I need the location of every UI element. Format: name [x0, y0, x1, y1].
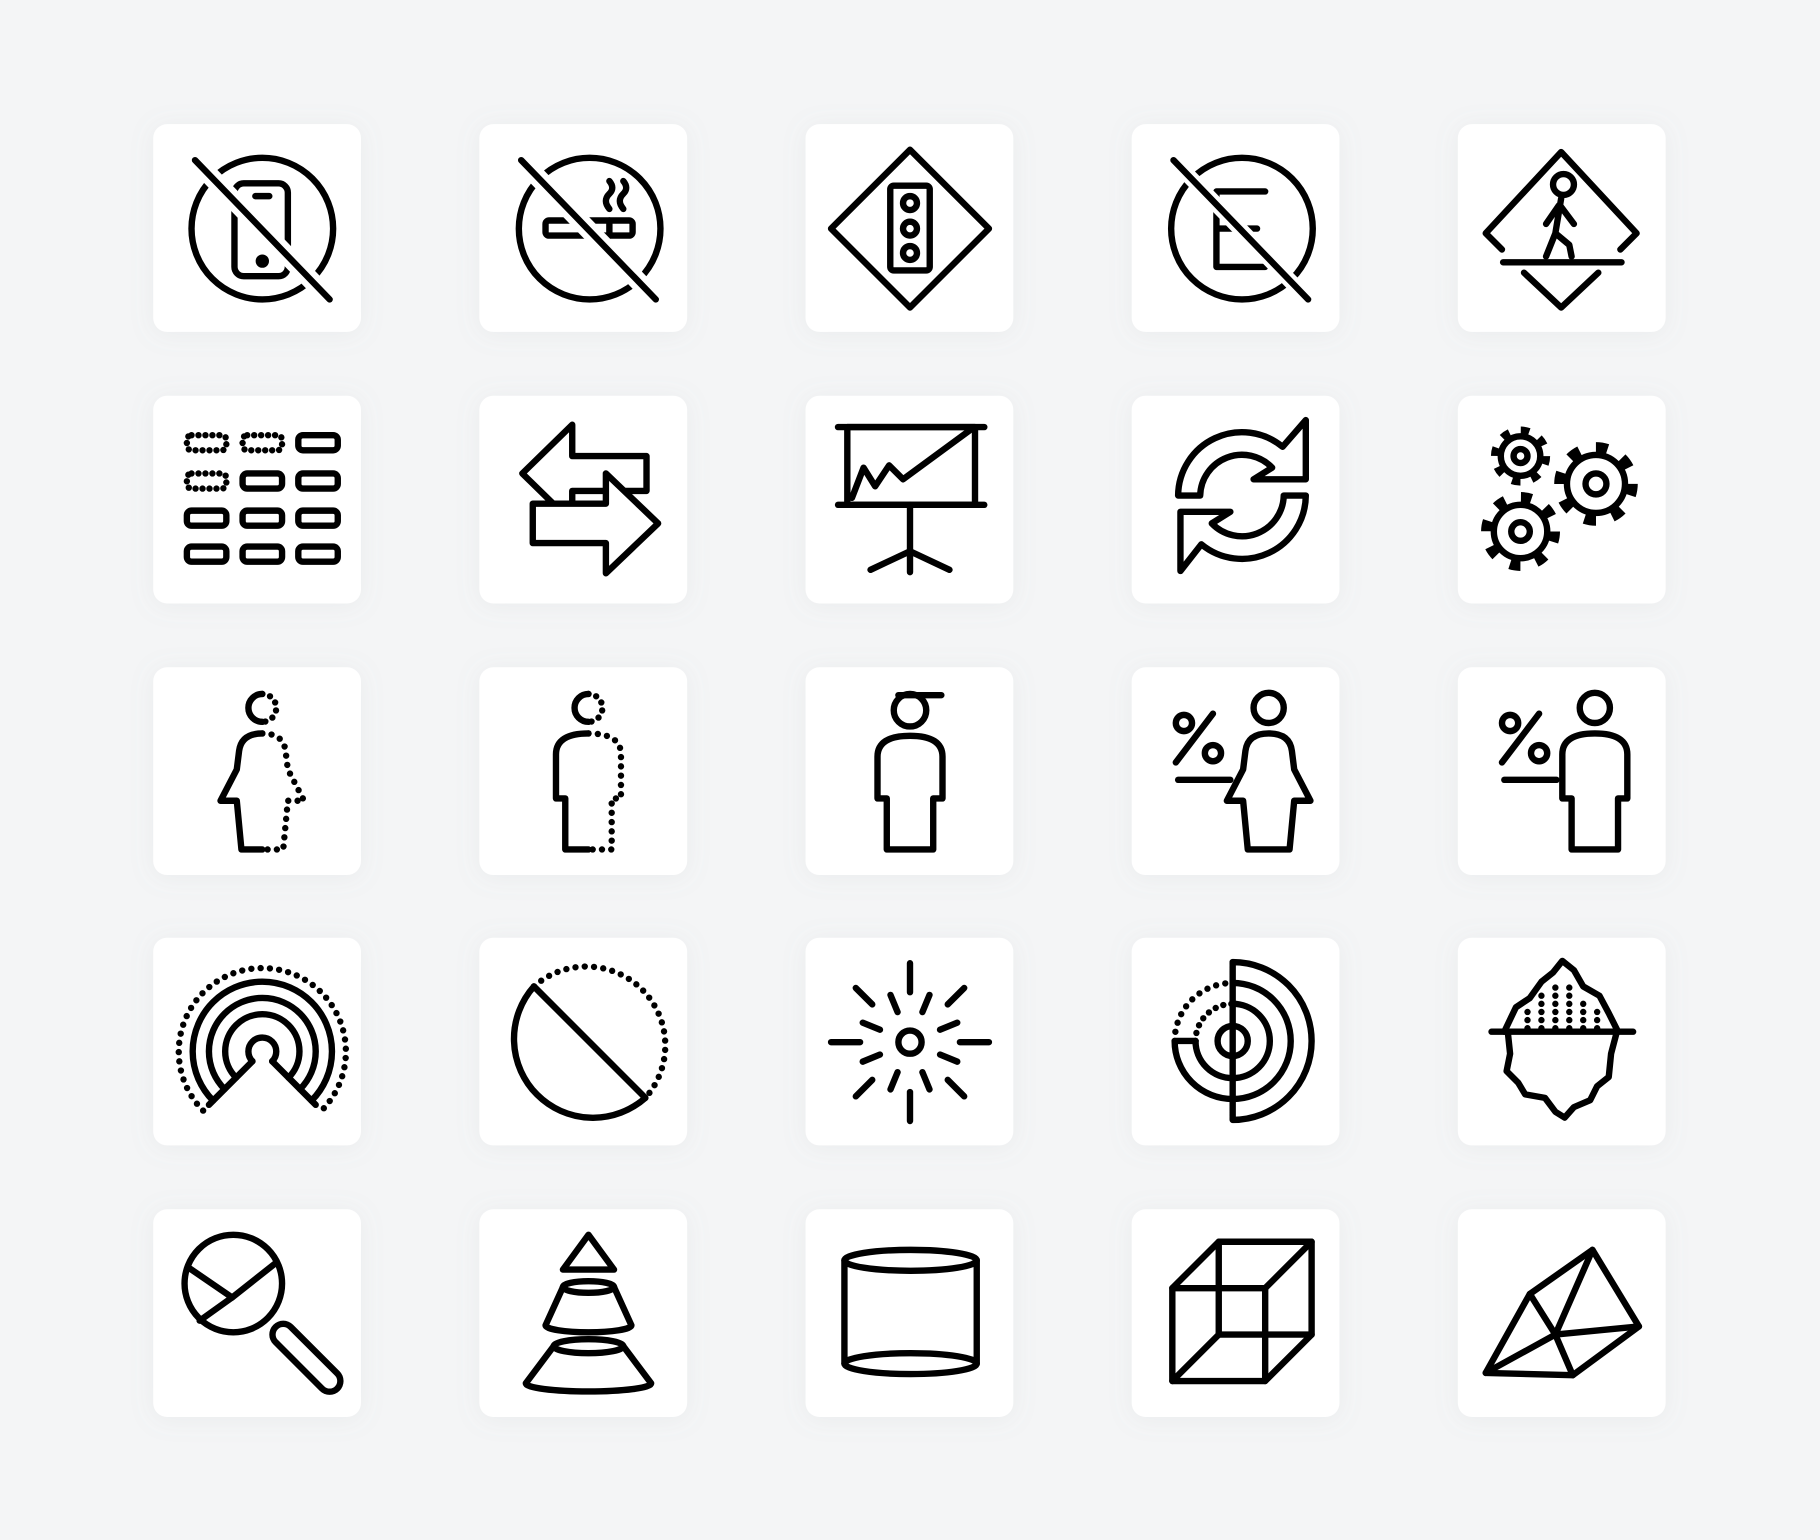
icon: layered cone: [479, 1209, 687, 1417]
icon: refresh: [1132, 396, 1339, 603]
icon: pedestrian crossing: [1458, 124, 1666, 332]
icon: wireframe cube: [1132, 1209, 1339, 1417]
icon: male dotted: [479, 667, 687, 875]
icon: female dotted: [153, 667, 361, 875]
icon: presentation chart: [806, 396, 1013, 603]
icon: sunburst: [806, 938, 1013, 1145]
icon: percent male: [1458, 667, 1666, 875]
icon: pie magnifier: [153, 1209, 361, 1417]
icon: percent female: [1132, 667, 1339, 875]
icon: half dotted circle slash: [479, 938, 687, 1145]
icon: concentric half circles: [1132, 938, 1339, 1145]
icon: male with cap: [806, 667, 1013, 875]
icon: traffic light sign: [806, 124, 1013, 332]
icon: cylinder: [806, 1209, 1013, 1417]
icon: no smoking: [479, 124, 687, 332]
icon: no E: [1132, 124, 1339, 332]
icon: iceberg: [1458, 938, 1666, 1145]
icon: no phone: [153, 124, 361, 332]
icon: keypad grid: [153, 396, 361, 603]
icon: crystal: [1458, 1209, 1666, 1417]
icon: swap arrows: [479, 396, 687, 603]
icon: gears: [1458, 396, 1666, 603]
icon: radar arcs: [153, 938, 361, 1145]
